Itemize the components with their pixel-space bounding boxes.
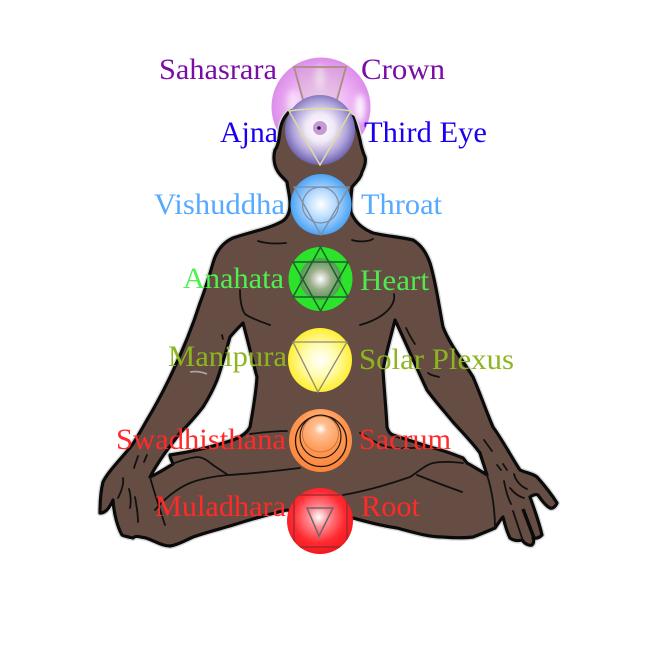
label: Manipura: Manipura: [168, 340, 287, 373]
label: Sacrum: Sacrum: [359, 423, 451, 456]
root chakra: [287, 488, 353, 554]
body detail lines: [118, 239, 527, 538]
seated figure: [100, 100, 557, 546]
label: Third Eye: Third Eye: [364, 116, 487, 149]
throat chakra: [290, 174, 352, 235]
third eye chakra: [285, 95, 355, 165]
label: Crown: Crown: [361, 53, 445, 86]
sacral chakra: [289, 409, 352, 472]
heart chakra: [288, 247, 352, 311]
crown chakra: [272, 58, 370, 156]
label: Throat: Throat: [361, 188, 443, 221]
label: Swadhisthana: Swadhisthana: [116, 423, 286, 456]
label: Sahasrara: Sahasrara: [159, 53, 277, 86]
label: Vishuddha: Vishuddha: [154, 188, 285, 221]
label: Muladhara: Muladhara: [155, 490, 286, 523]
label: Ajna: Ajna: [220, 116, 278, 149]
label: Root: Root: [361, 490, 421, 523]
label: Heart: Heart: [360, 264, 430, 297]
label: Anahata: Anahata: [183, 262, 284, 295]
solar plexus chakra: [288, 328, 352, 392]
label: Solar Plexus: Solar Plexus: [359, 343, 514, 376]
